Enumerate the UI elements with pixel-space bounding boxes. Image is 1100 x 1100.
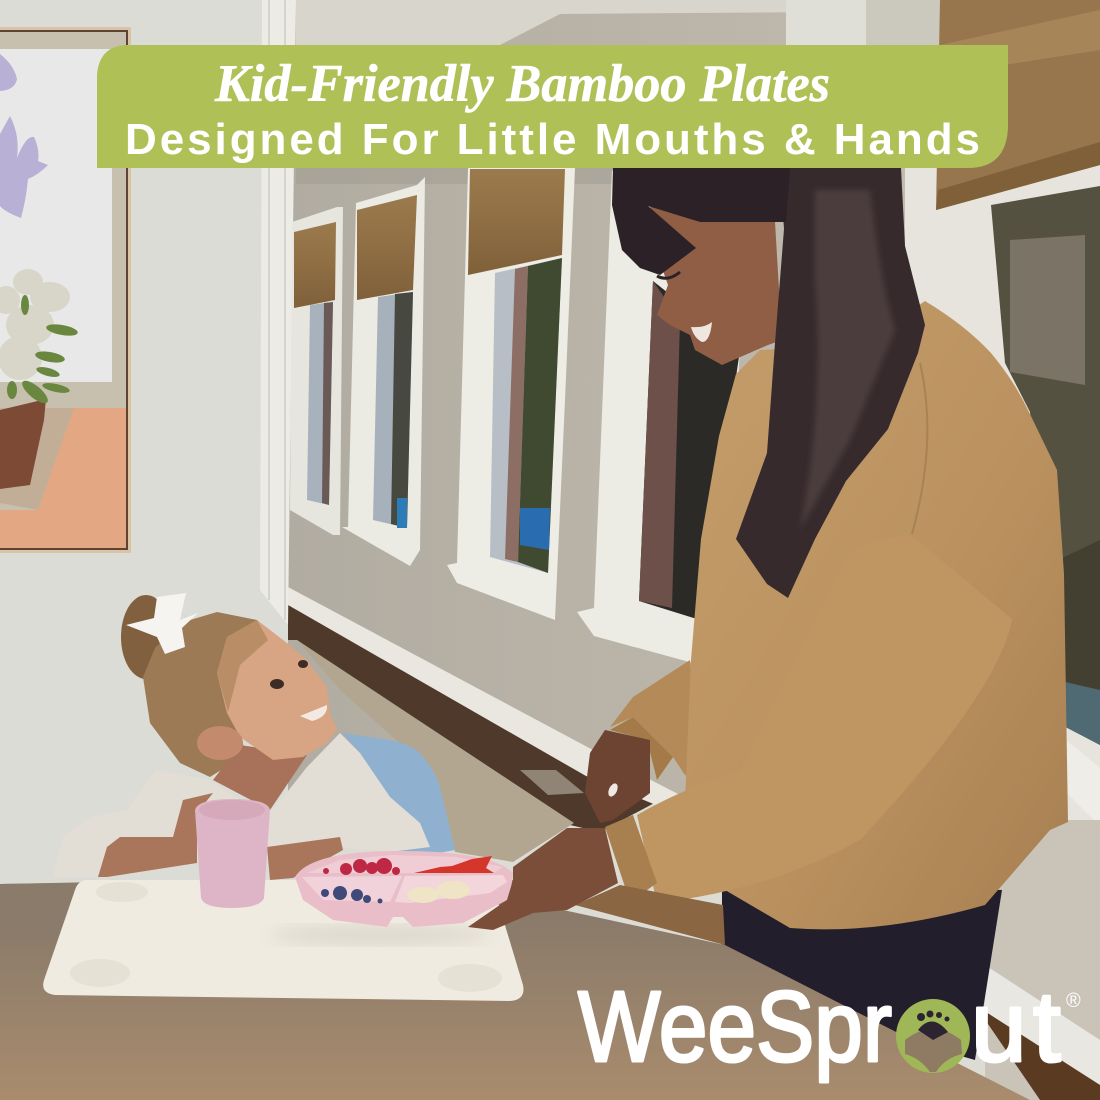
painting white flowers — [0, 269, 70, 380]
WeeSprout logo — [578, 971, 1081, 1083]
pink divided plate — [295, 851, 513, 927]
lower right wall and baseboard — [975, 820, 1100, 1100]
strawberries — [414, 856, 494, 873]
upper hand — [585, 730, 650, 823]
door frame — [260, 0, 942, 625]
sweater body — [685, 301, 1068, 929]
blueberries — [321, 886, 382, 904]
smile — [691, 322, 712, 342]
logo wordmark left: WeeSpr — [578, 971, 892, 1083]
forehead hairline shadow — [217, 620, 268, 712]
eyes — [270, 679, 284, 689]
placemat — [43, 880, 523, 1001]
fingernail — [606, 782, 620, 798]
raspberries — [323, 858, 400, 875]
banana slices — [407, 881, 470, 903]
woman — [585, 168, 1068, 1060]
bow — [126, 593, 198, 654]
right arm — [267, 837, 343, 880]
table top rear strip — [0, 880, 520, 940]
logo wordmark right: ut — [971, 971, 1061, 1083]
face — [217, 620, 337, 760]
wood beyond wrist — [575, 885, 725, 945]
face and neck — [650, 205, 782, 365]
neck — [213, 745, 307, 810]
right window — [905, 160, 1100, 840]
left arm and hand — [98, 793, 213, 877]
heading sans line: Designed For Little Mouths & Hands — [125, 115, 980, 164]
ear — [197, 726, 243, 760]
registered mark: ® — [1066, 990, 1081, 1012]
framed painting — [0, 27, 131, 553]
trousers — [722, 885, 1002, 1060]
near window 4 — [577, 170, 740, 665]
hair — [143, 612, 257, 777]
upper sleeve — [610, 660, 700, 780]
hair crown and bangs — [612, 168, 790, 275]
serving hand — [468, 828, 618, 930]
far window 1 — [290, 207, 343, 535]
child — [53, 593, 455, 880]
heading script line: Kid-Friendly Bamboo Plates — [214, 55, 830, 113]
table — [0, 881, 1030, 1100]
corridor floor and carpet — [288, 587, 680, 862]
lower cuff — [605, 815, 657, 902]
long hair — [736, 168, 925, 598]
shoulder seam — [912, 363, 927, 534]
heading banner — [97, 45, 1008, 168]
chair — [342, 733, 455, 860]
logo sprout-foot badge — [896, 999, 970, 1073]
pink cup — [195, 799, 270, 908]
hair highlight — [800, 190, 895, 530]
painting purple flower — [0, 116, 48, 218]
upper cuff — [610, 717, 673, 780]
sweater — [53, 733, 430, 877]
hair bun — [121, 595, 171, 679]
far window 3 — [447, 168, 575, 620]
left wall — [0, 0, 295, 900]
mouth — [300, 705, 327, 721]
painting leaves — [7, 295, 79, 407]
corridor back wall — [288, 0, 950, 800]
closed eye — [657, 272, 680, 278]
forward sleeve — [637, 536, 1012, 903]
far window 2 — [342, 177, 425, 566]
bamboo shade right — [936, 0, 1100, 210]
